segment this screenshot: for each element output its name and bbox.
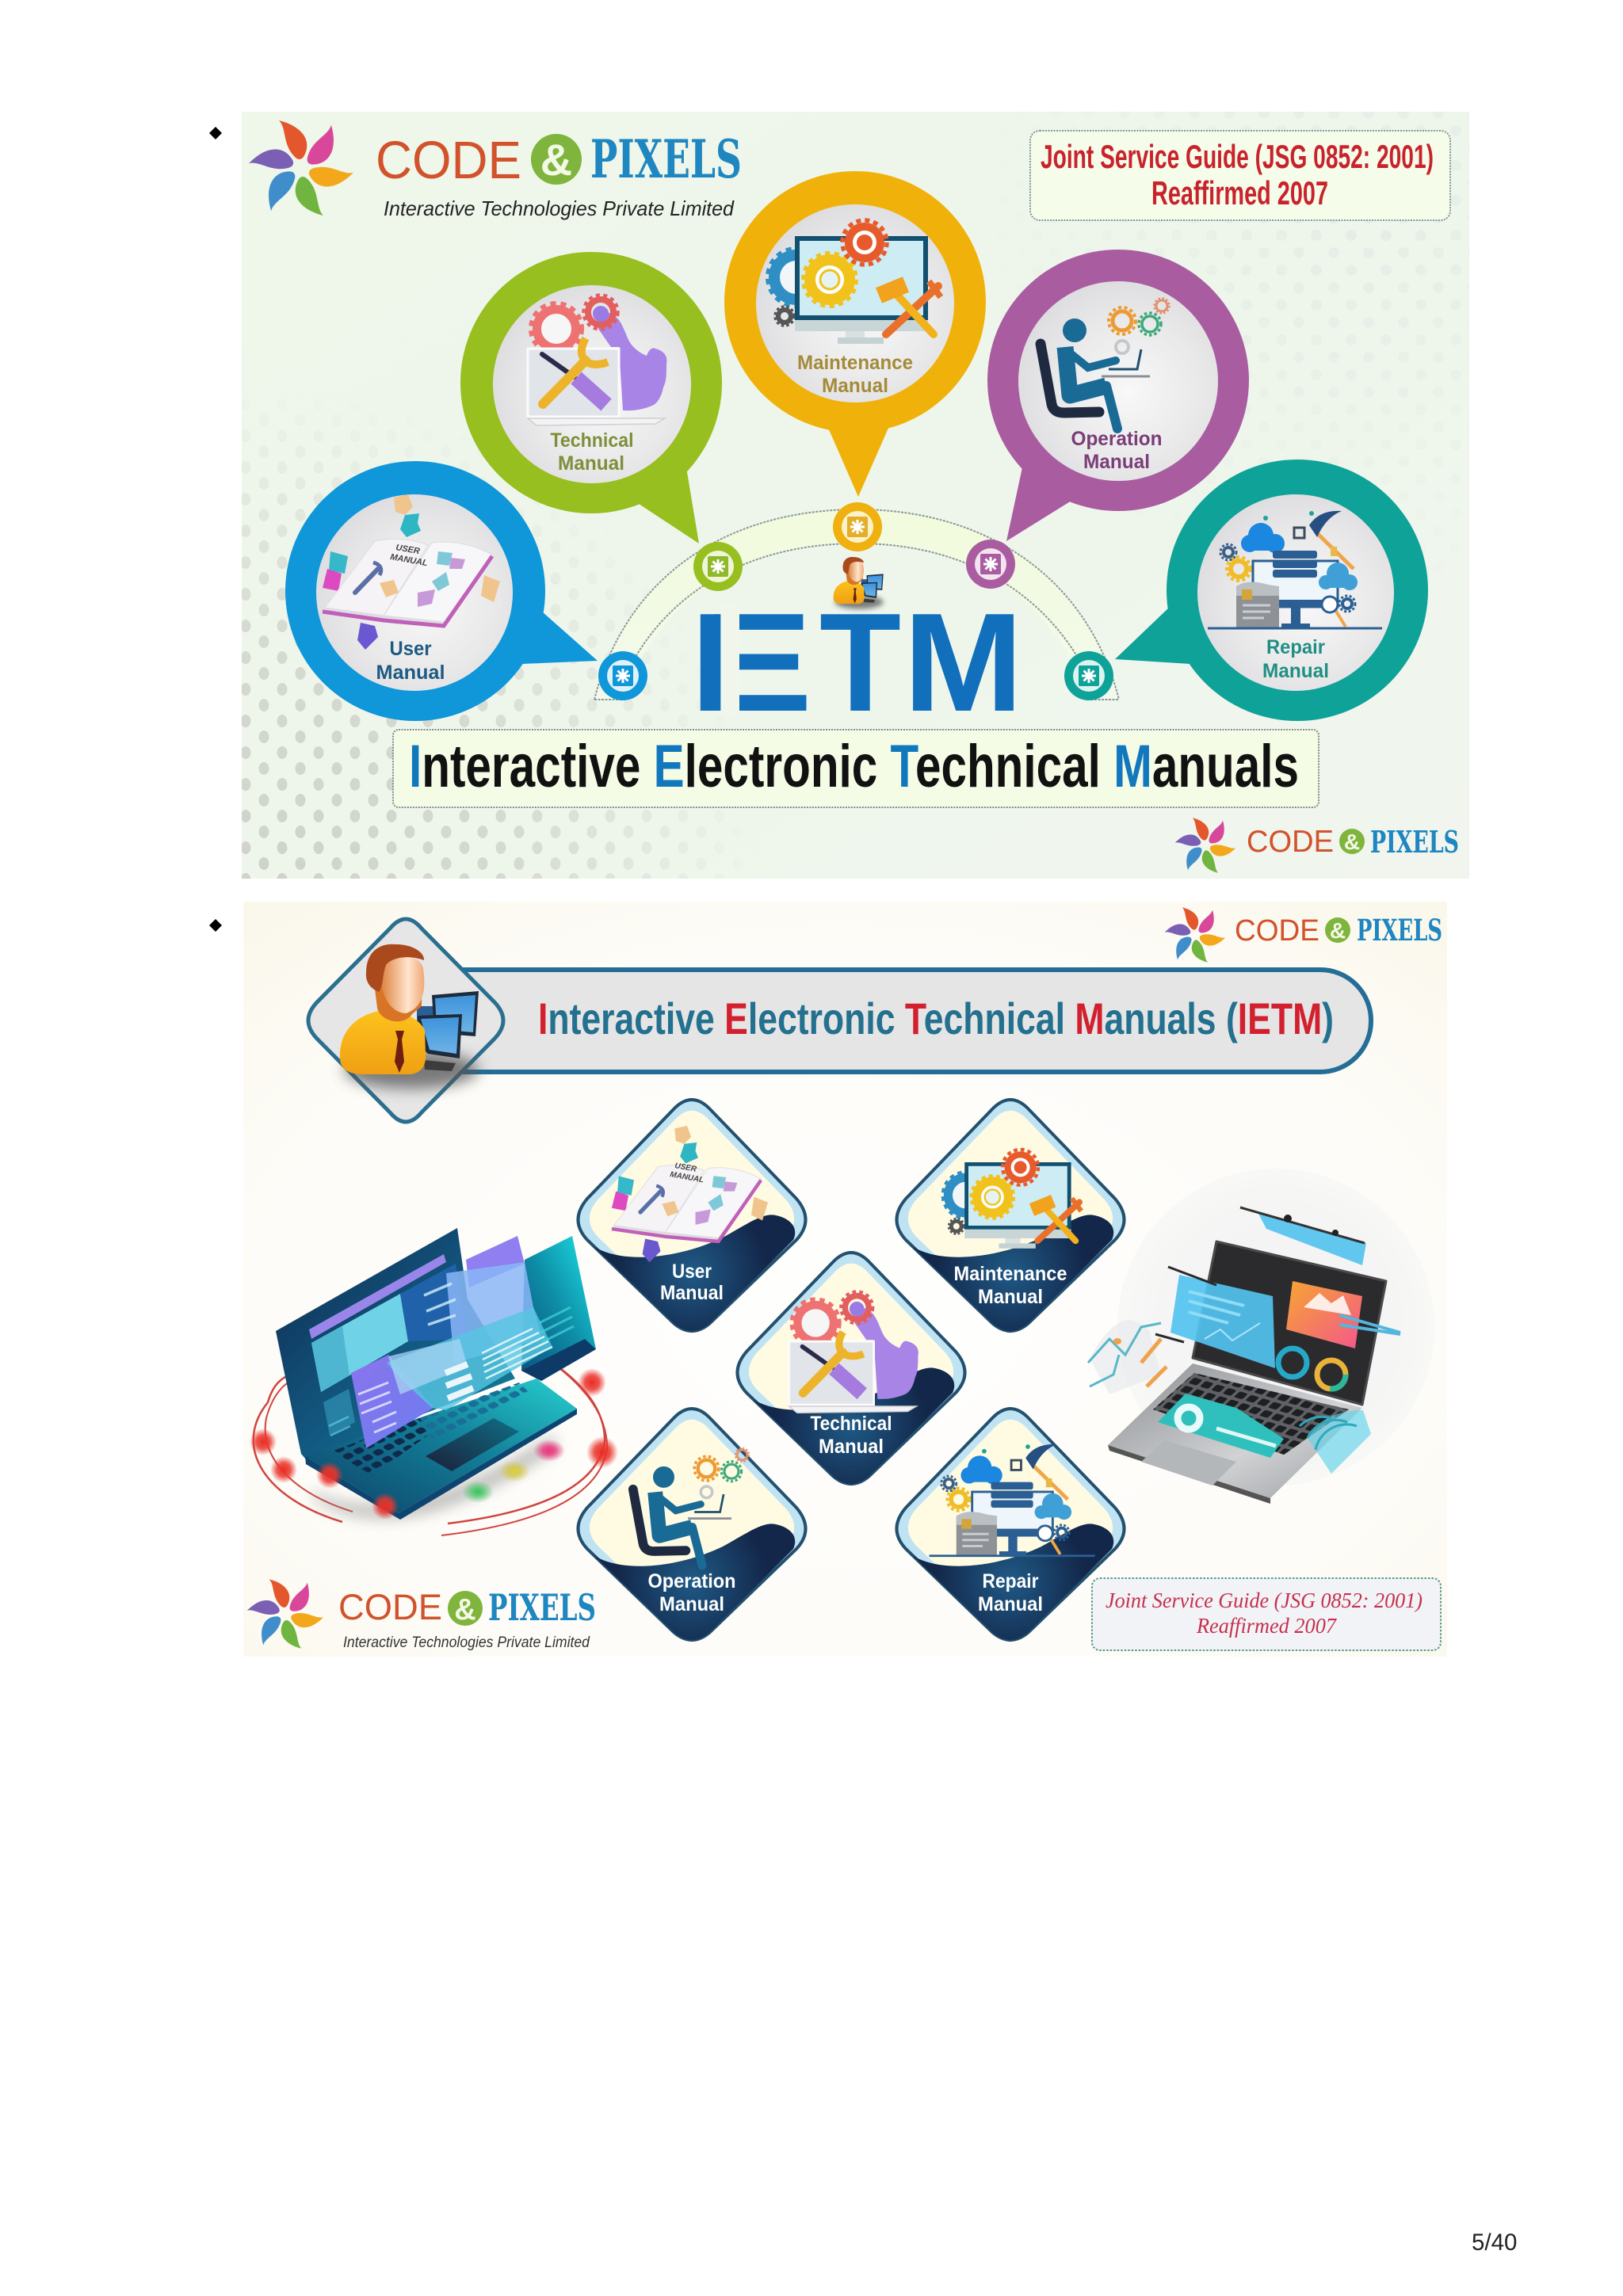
bubble: Repair Manual: Repair (1266, 636, 1325, 658)
heading: IETM logotype: I (691, 584, 730, 741)
illustration: laptop with dashboard and floating panels (1088, 1169, 1434, 1504)
bubble: User Manual: MANUAL (389, 552, 429, 568)
illustration: laptop with holographic screens and red orbit rings (250, 1228, 618, 1535)
bubble: Operation Manual: Operation (1071, 428, 1162, 450)
logo: Code and Pixels with tagline, bottom left (247, 1579, 596, 1651)
icon: small user at computer (834, 557, 884, 609)
callout: Joint Service Guide: Reaffirmed 2007 (1151, 174, 1328, 212)
banner: Interactive Electronic Technical Manuals: Interactive Electronic Technical Manuals (409, 733, 1299, 800)
bubble: Maintenance Manual (724, 171, 986, 497)
logo: Code and Pixels with tagline: Interactive Technologies Private Limited (384, 196, 735, 220)
diamond: User Manual: User (672, 1261, 712, 1283)
logo: small Code and Pixels, bottom right: PIXELS (1370, 824, 1459, 860)
diamond: Operation Manual: Manual (659, 1593, 724, 1615)
logo: small Code and Pixels, bottom right: CODE (1247, 825, 1334, 859)
diamond: Maintenance Manual: Maintenance (954, 1263, 1067, 1285)
bubble: Operation Manual: Manual (1083, 451, 1150, 473)
logo: small Code and Pixels, top right: CODE (1235, 914, 1319, 948)
bubble: Repair Manual (1115, 460, 1428, 721)
logo: small Code and Pixels, top right: PIXELS (1357, 913, 1442, 948)
logo: Code and Pixels with tagline, bottom left: CODE (338, 1587, 442, 1627)
bubble: Technical Manual: Technical (550, 429, 634, 452)
callout: Joint Service Guide: Joint Service Guide (JSG 0852: 2001) (1041, 138, 1434, 175)
bubble: User Manual: User (390, 638, 432, 660)
page number: 5/40 (1472, 2229, 1517, 2256)
logo: Code and Pixels with tagline (249, 120, 742, 220)
diamond: User Manual: Manual (660, 1282, 724, 1304)
logo: Code and Pixels with tagline: PIXELS (590, 128, 742, 190)
panel background with halftone dots (242, 112, 1469, 879)
page: document page with two infographic slides (209, 112, 1517, 2250)
logo: Code and Pixels with tagline: CODE (376, 131, 521, 190)
panel background (243, 902, 1447, 1657)
heading: IETM logotype: M (903, 584, 1023, 741)
callout: Joint Service Guide, bottom right: Reaffirmed 2007 (1196, 1614, 1337, 1638)
bubble: Technical Manual (460, 252, 722, 543)
diamond: Repair Manual: Manual (978, 1593, 1043, 1615)
panel: IETM overview slide (242, 112, 1469, 879)
title bar: Interactive Electronic Technical Manuals (IETM): Interactive Electronic Technical Manuals (IETM) (538, 994, 1334, 1043)
callout: Joint Service Guide, bottom right (1092, 1578, 1441, 1650)
heading: IETM logotype (691, 584, 1023, 741)
bubble: Maintenance Manual: Maintenance (797, 352, 913, 374)
bubble: User Manual: USER (395, 543, 421, 556)
title bar: Interactive Electronic Technical Manuals (IETM) (372, 970, 1371, 1072)
logo: Code and Pixels with tagline, bottom left: & (454, 1593, 476, 1627)
diamond: Operation Manual: Operation (648, 1570, 735, 1592)
logo: small Code and Pixels, top right (1165, 907, 1442, 963)
diamond: Maintenance Manual (897, 1100, 1124, 1331)
bubble: User Manual: Manual (376, 662, 445, 684)
panel: IETM manual types slide (243, 902, 1447, 1657)
logo: Code and Pixels with tagline, bottom left: PIXELS (488, 1586, 596, 1629)
diamond: User Manual: USER (674, 1161, 698, 1174)
diamond: Technical Manual (737, 1253, 965, 1484)
bubble: Technical Manual: Manual (558, 452, 624, 475)
logo: small Code and Pixels, bottom right (1175, 818, 1459, 873)
logo: small Code and Pixels, top right: & (1330, 918, 1346, 943)
diamond: User Manual: MANUAL (669, 1170, 705, 1184)
callout: Joint Service Guide, bottom right: Joint Service Guide (JSG 0852: 2001) (1106, 1589, 1423, 1612)
bubble: Maintenance Manual: Manual (822, 375, 888, 397)
logo: Code and Pixels with tagline: & (540, 135, 572, 185)
diamond: User Manual (579, 1100, 805, 1331)
heading: IETM logotype: E (704, 584, 813, 741)
logo: small Code and Pixels, bottom right: & (1344, 830, 1360, 854)
badge: user at computer diamond (308, 919, 503, 1122)
diamond: Operation Manual (579, 1409, 805, 1640)
logo: Code and Pixels with tagline, bottom left: Interactive Technologies Private Limited (343, 1634, 590, 1651)
diamond: Maintenance Manual: Manual (978, 1286, 1043, 1308)
nodes: five arch connector badges (598, 502, 1113, 700)
diamond: Repair Manual (897, 1409, 1124, 1640)
bullet: second list marker (209, 919, 222, 932)
arch: connector band behind nodes (594, 509, 1119, 700)
diamond: Technical Manual: Manual (819, 1436, 884, 1458)
diamond: Repair Manual: Repair (983, 1570, 1039, 1592)
bubble: Operation Manual (987, 250, 1249, 541)
bullet: first list marker (209, 127, 222, 139)
bubble: Repair Manual: Manual (1262, 660, 1329, 682)
heading: IETM logotype: T (819, 584, 901, 741)
callout: Joint Service Guide (1030, 131, 1450, 220)
bubble: User Manual (285, 461, 598, 721)
diamond: Technical Manual: Technical (810, 1413, 892, 1435)
